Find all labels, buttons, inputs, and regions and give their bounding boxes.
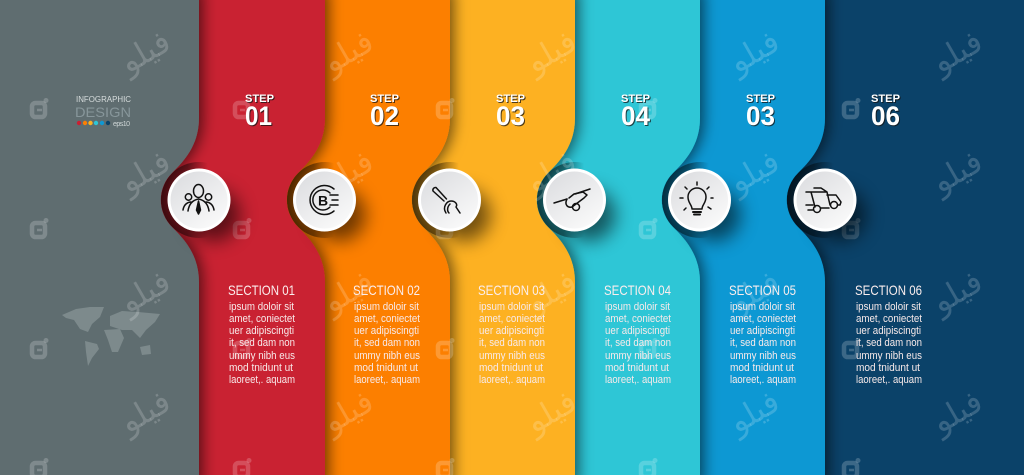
step 04: STEP (621, 93, 650, 105)
section 01 text: uer adipiscingti (229, 325, 294, 337)
section 06 text (855, 282, 923, 386)
circle 04 with handshake icon (543, 168, 616, 241)
section 06 text: ipsum doloir sit (856, 301, 921, 313)
step 06: STEP (871, 93, 900, 105)
panel: section 02 orange (0, 0, 450, 475)
step 04: 04 (621, 101, 650, 131)
circle 06 with delivery truck icon (794, 168, 866, 241)
section 05 text: SECTION 05 (729, 282, 796, 298)
icon: light bulb (680, 182, 713, 214)
panel: section 03 yellow (0, 0, 575, 475)
circle 05 with light bulb icon (668, 168, 740, 241)
section 03 text: amet, coniectet (479, 313, 545, 325)
step 02: STEP (370, 93, 399, 105)
world map (62, 307, 160, 366)
step 05: 03 (746, 101, 775, 131)
section 05 text: ipsum doloir sit (730, 301, 795, 313)
section 01 text: laoreet,. aquam (229, 374, 295, 386)
section 02 text: ummy nibh eus (354, 350, 421, 362)
logo line: eps10: eps10 (113, 121, 130, 128)
section 01 text: SECTION 01 (228, 282, 295, 298)
section 02 text: it, sed dam non (354, 337, 420, 349)
section 04 text: it, sed dam non (605, 337, 671, 349)
section 01 text: amet, coniectet (229, 313, 295, 325)
infographic design logo (75, 95, 131, 128)
circle 02 with bitcoin icon (293, 168, 366, 241)
step 03: 03 (496, 101, 525, 131)
section 03 text: uer adipiscingti (479, 325, 544, 337)
section 05 text: ummy nibh eus (730, 350, 797, 362)
step 01: STEP (245, 93, 274, 105)
circle 01 with people icon (168, 168, 240, 241)
section 04 text (604, 282, 672, 386)
section 06 text: it, sed dam non (856, 337, 922, 349)
notch shade 04 (537, 162, 613, 238)
section 03 text: mod tnidunt ut (479, 362, 543, 374)
circle 03 with broken link icon (418, 168, 490, 241)
notch shade 06 (787, 162, 863, 238)
step 02: 02 (370, 101, 399, 131)
section 01 text: mod tnidunt ut (229, 362, 293, 374)
icon: delivery truck (806, 188, 841, 212)
logo line: infographic: INFOGRAPHIC (76, 95, 131, 104)
step 05: STEP (746, 93, 775, 105)
section 02 text (353, 282, 421, 386)
step 06: 06 (871, 101, 900, 131)
section 04 text: laoreet,. aquam (605, 374, 671, 386)
section 04 text: SECTION 04 (604, 282, 671, 298)
section 01 text: ipsum doloir sit (229, 301, 294, 313)
section 05 text (729, 282, 797, 386)
section 04 text: amet, coniectet (605, 313, 671, 325)
icon: broken link (433, 187, 460, 213)
section 02 text: SECTION 02 (353, 282, 420, 298)
panel: grey intro (0, 0, 199, 475)
section 04 text: ummy nibh eus (605, 350, 672, 362)
section 01 text: ummy nibh eus (229, 350, 296, 362)
section 05 text: uer adipiscingti (730, 325, 795, 337)
section 03 text: laoreet,. aquam (479, 374, 545, 386)
section 01 text (228, 282, 296, 386)
section 06 text: SECTION 06 (855, 282, 922, 298)
logo line: design: DESIGN (75, 104, 131, 120)
section 02 text: uer adipiscingti (354, 325, 419, 337)
notch shade 05 (662, 162, 738, 238)
section 04 text: uer adipiscingti (605, 325, 670, 337)
section 06 text: laoreet,. aquam (856, 374, 922, 386)
section 06 text: amet, coniectet (856, 313, 922, 325)
section 05 text: mod tnidunt ut (730, 362, 794, 374)
section 04 text: ipsum doloir sit (605, 301, 670, 313)
section 03 text (478, 282, 546, 386)
section 05 text: it, sed dam non (730, 337, 796, 349)
notch shade 03 (412, 162, 488, 238)
section 06 text: ummy nibh eus (856, 350, 923, 362)
icon: bitcoin coin: B (318, 192, 328, 208)
section 03 text: ummy nibh eus (479, 350, 546, 362)
section 06 text: uer adipiscingti (856, 325, 921, 337)
section 02 text: amet, coniectet (354, 313, 420, 325)
section 02 text: ipsum doloir sit (354, 301, 419, 313)
panel: section 01 red (0, 0, 325, 475)
section 01 text: it, sed dam non (229, 337, 295, 349)
step 01: 01 (245, 101, 272, 131)
section 02 text: mod tnidunt ut (354, 362, 418, 374)
section 04 text: mod tnidunt ut (605, 362, 669, 374)
panel: section 04 teal (0, 0, 700, 475)
notch shade 02 (287, 162, 363, 238)
section 03 text: it, sed dam non (479, 337, 545, 349)
icon: handshake (554, 189, 590, 210)
section 02 text: laoreet,. aquam (354, 374, 420, 386)
section 03 text: ipsum doloir sit (479, 301, 544, 313)
icon: people (183, 184, 214, 214)
section 05 text: laoreet,. aquam (730, 374, 796, 386)
section 06 text: mod tnidunt ut (856, 362, 920, 374)
logo colour dots (77, 121, 110, 125)
section 05 text: amet, coniectet (730, 313, 796, 325)
notch shade 01 (161, 162, 237, 238)
section 03 text: SECTION 03 (478, 282, 545, 298)
step 03: STEP (496, 93, 525, 105)
